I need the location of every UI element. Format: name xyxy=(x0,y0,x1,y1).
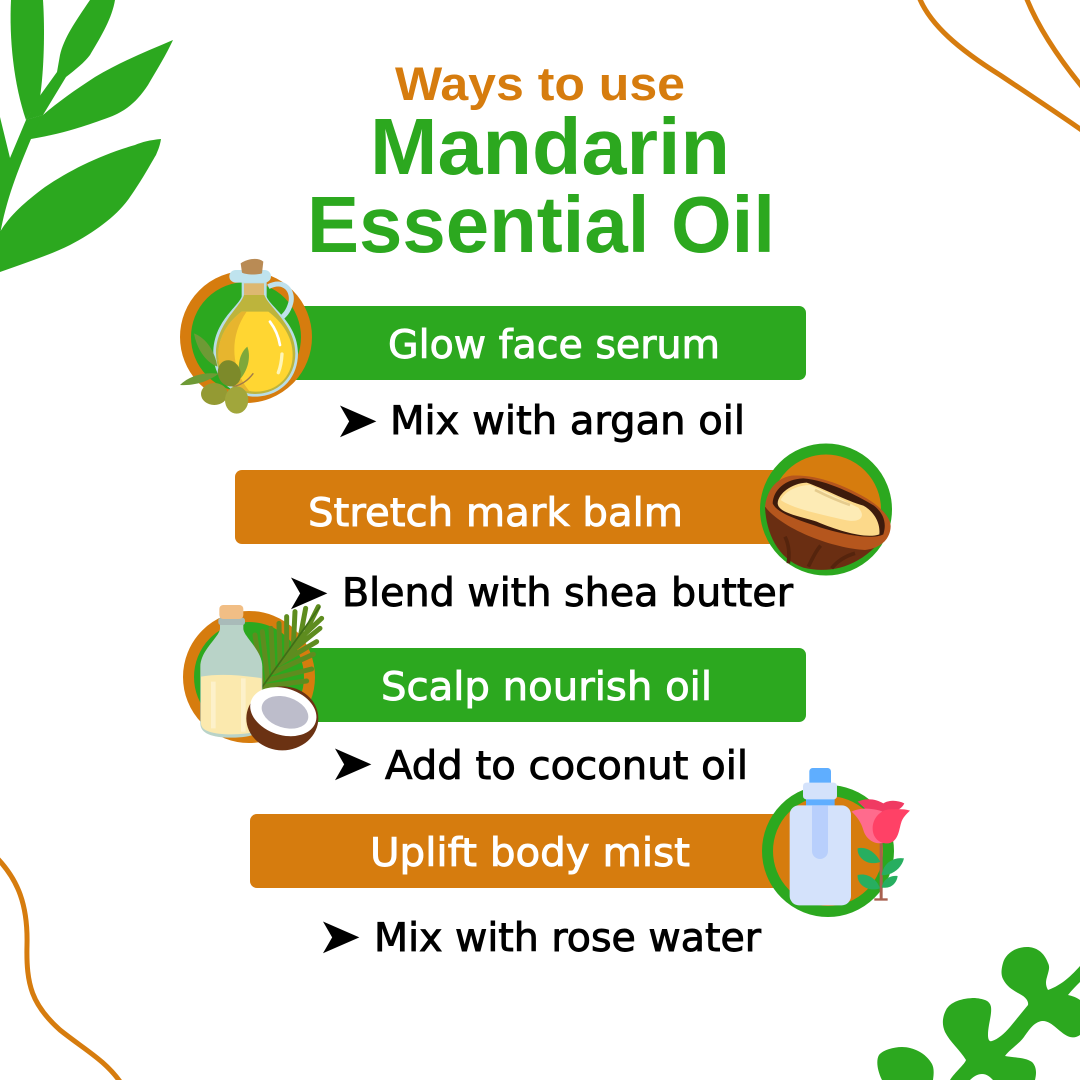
title xyxy=(307,57,775,269)
title line: ways to use: Ways to use xyxy=(395,57,685,110)
instruction: blend with shea butter xyxy=(285,563,794,621)
item 3: scalp nourish oil xyxy=(188,605,806,750)
bar: scalp nourish oil xyxy=(290,648,806,722)
bar label: Stretch mark balm xyxy=(308,491,683,536)
item 4: uplift body mist xyxy=(250,768,910,912)
instruction text: Add to coconut oil xyxy=(385,744,748,789)
badge circle xyxy=(768,790,888,912)
icon: shea butter bowl xyxy=(765,476,891,570)
icon: dropper bottle and rose xyxy=(790,768,910,905)
instruction text: Mix with rose water xyxy=(374,916,762,961)
bar: stretch mark balm xyxy=(235,470,805,544)
instruction: mix with argan oil xyxy=(334,391,745,449)
item 2: stretch mark balm xyxy=(235,449,891,570)
arrow: ➤ xyxy=(285,563,330,621)
bar label: Glow face serum xyxy=(388,323,720,368)
arrow: ➤ xyxy=(329,734,374,792)
arrow: ➤ xyxy=(317,907,362,965)
bar: uplift body mist xyxy=(250,814,790,888)
instruction: mix with rose water xyxy=(317,907,762,965)
instruction: add to coconut oil xyxy=(329,734,748,792)
instruction text: Blend with shea butter xyxy=(342,571,794,616)
icon: olive oil jug xyxy=(180,259,298,414)
bar label: Scalp nourish oil xyxy=(381,665,712,710)
decoration: orange curves top right xyxy=(919,0,1080,131)
bar label: Uplift body mist xyxy=(370,831,690,876)
instruction text: Mix with argan oil xyxy=(390,399,745,444)
icon: oil bottle, palm frond and coconut xyxy=(200,605,323,750)
decoration: green leaf branch top left xyxy=(0,0,173,272)
title line: essential oil: Essential Oil xyxy=(307,180,775,269)
badge circle xyxy=(186,276,306,398)
item 1: glow face serum xyxy=(180,259,806,414)
arrow: ➤ xyxy=(334,391,379,449)
decoration: green leaves bottom right xyxy=(877,947,1080,1080)
decoration: orange curve bottom left xyxy=(0,858,121,1080)
badge circle xyxy=(766,449,886,570)
badge circle xyxy=(188,616,310,738)
title line: mandarin: Mandarin xyxy=(370,102,730,191)
bar: glow face serum xyxy=(290,306,806,380)
